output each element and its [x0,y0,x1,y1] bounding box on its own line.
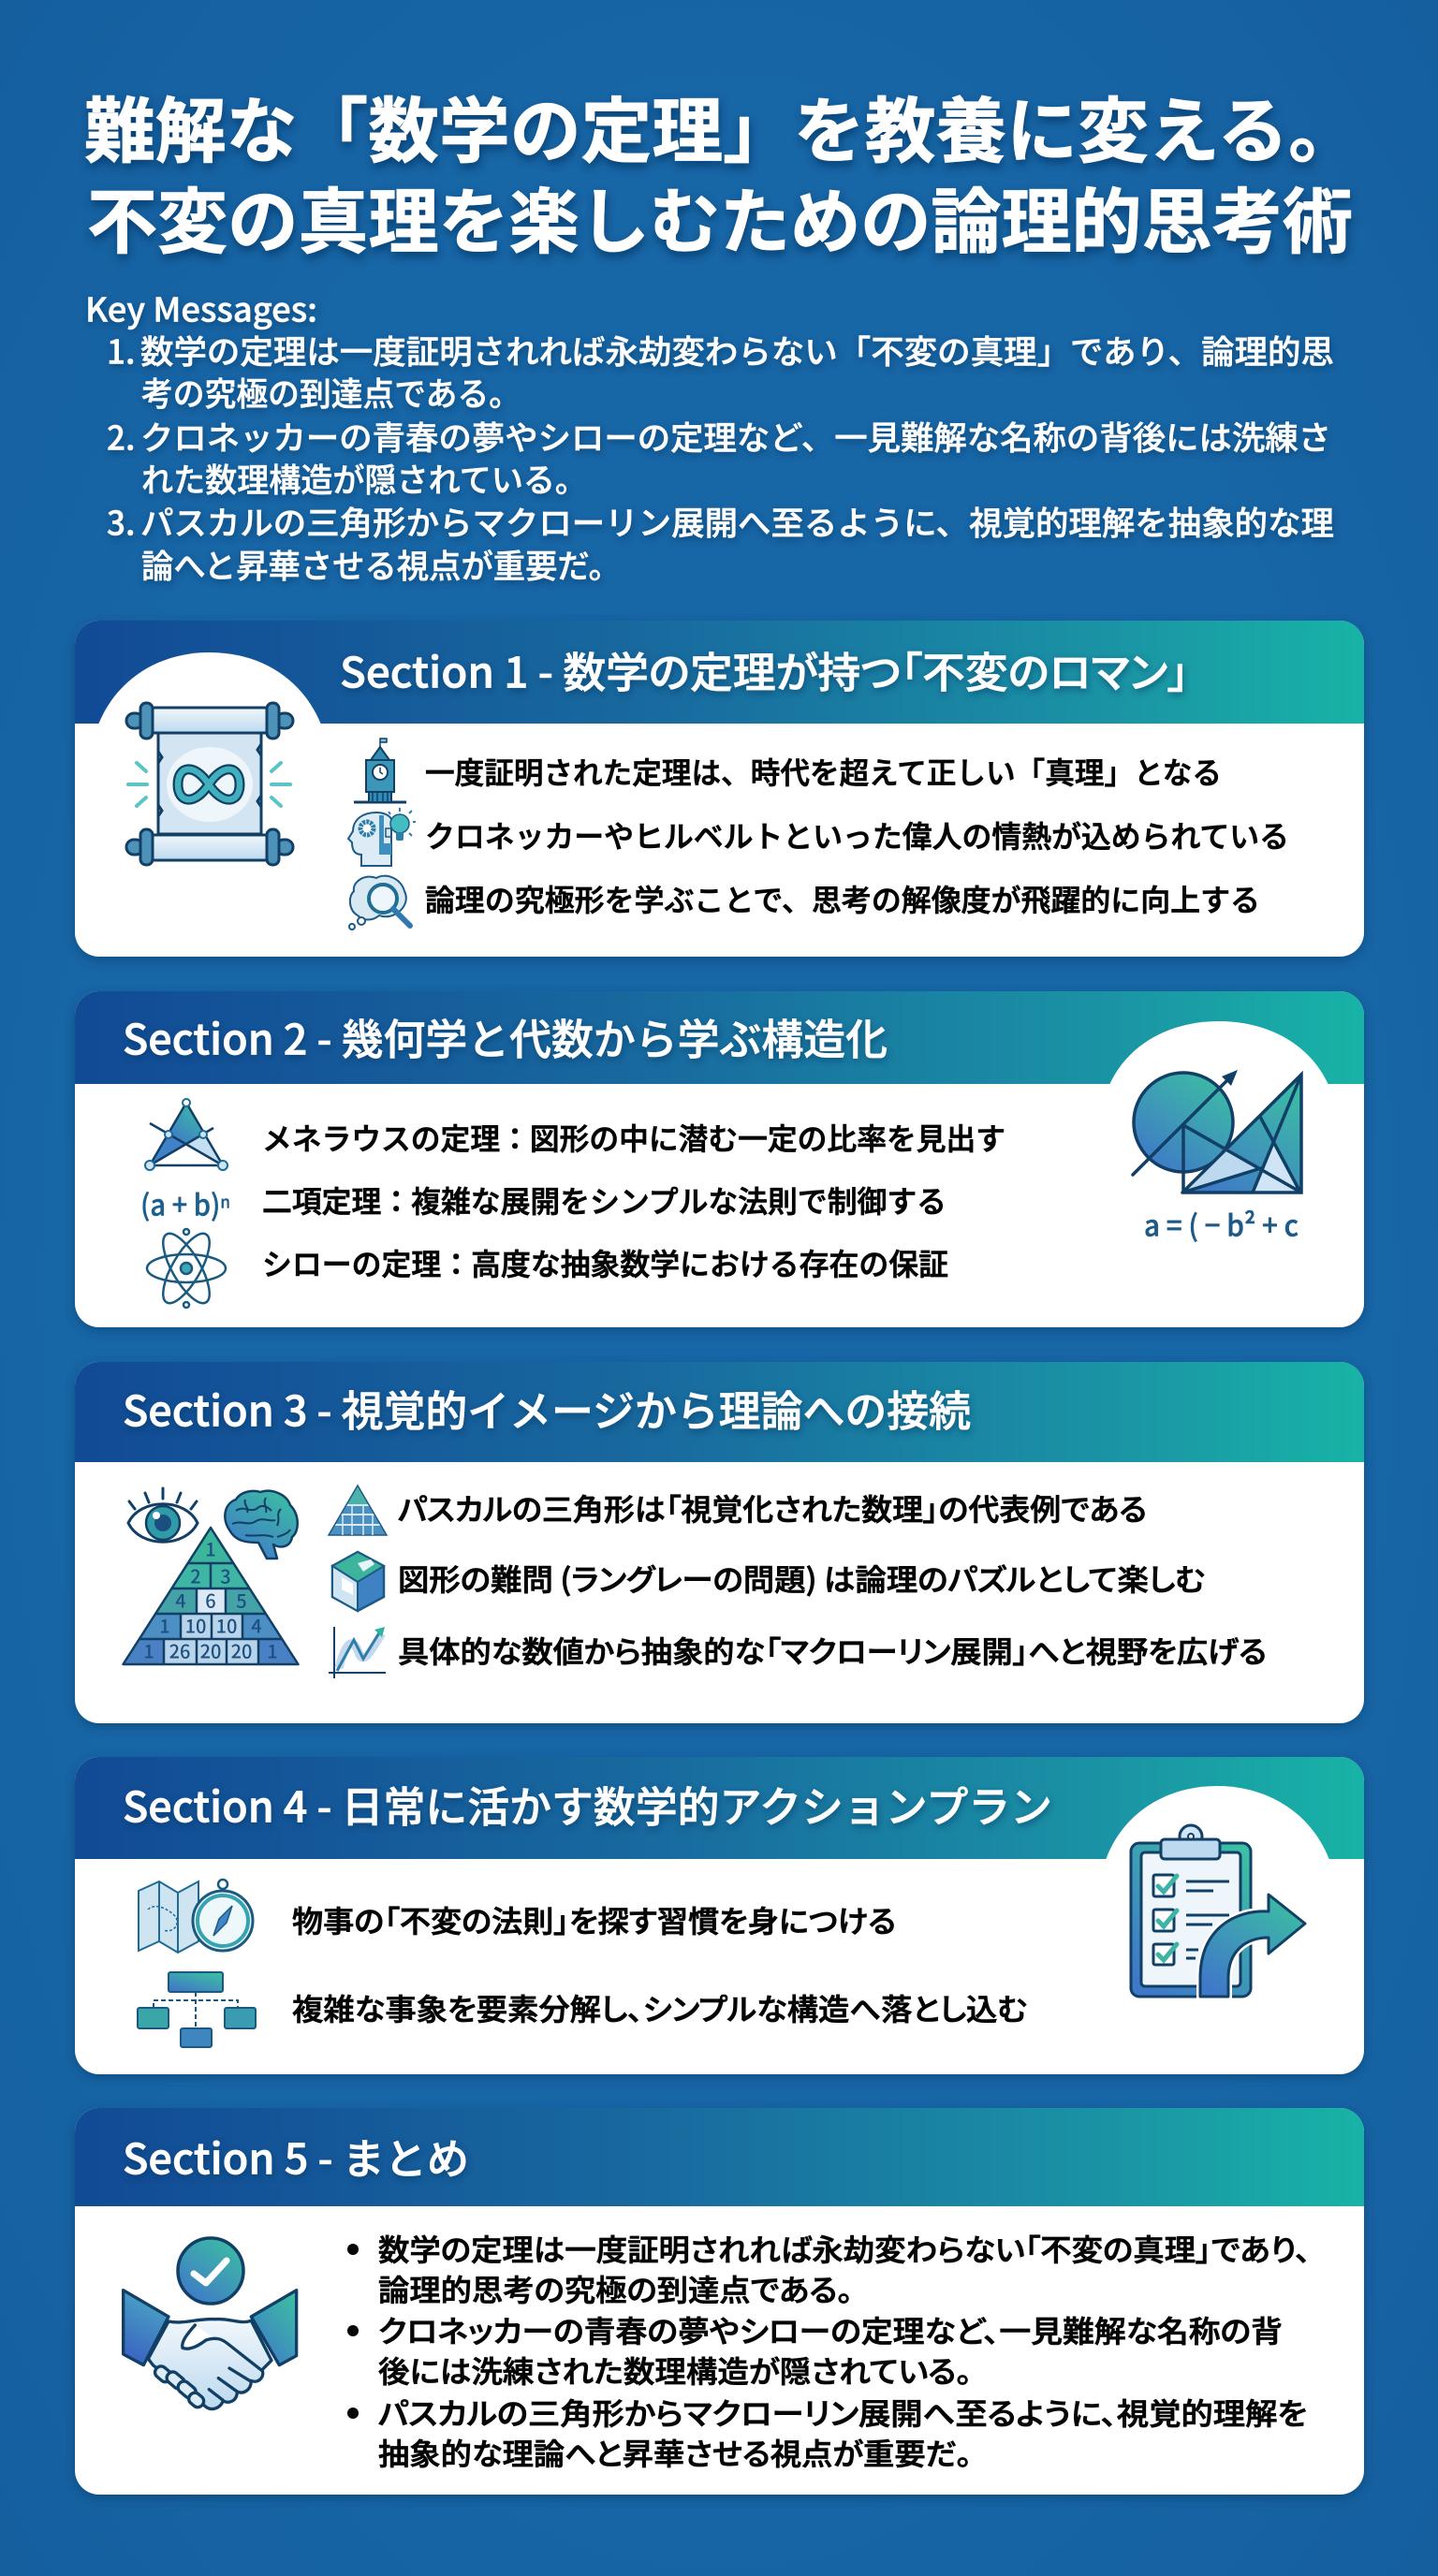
chart: pascal triangle [124,1528,298,1664]
section 1 heading: Section 1 - 数学の定理が持つ「不変のロマン」 [340,638,1189,700]
key messages [85,285,1334,588]
section 5 summary list: パスカルの三角形からマクローリン展開へ至るように、視覚的理解を [378,2391,1307,2434]
section 5 summary list [347,2227,1311,2474]
key messages: Key Messages: [85,285,317,331]
icon: geometry figure with formula [1133,1070,1301,1245]
title: 難解な「数学の定理」を教養に変える。 [84,74,1359,177]
section 5 heading: Section 5 - まとめ [123,2125,469,2187]
key messages: 1. [107,326,135,374]
chart: pascal triangle: 1 [267,1636,278,1664]
section 1 bullet text: 論理の究極形を学ぶことで、思考の解像度が飛躍的に向上する [425,877,1260,920]
panel: section 3 [75,1362,1364,1723]
chart: pascal triangle: 26 [169,1636,190,1664]
key messages: 論へと昇華させる視点が重要だ。 [141,541,621,588]
panel: section 2 [75,991,1364,1327]
panel: section 1 [75,621,1364,957]
section 5 summary list: クロネッカーの青春の夢やシローの定理など、一見難解な名称の背 [378,2308,1283,2351]
section 5 summary list: 後には洗練された数理構造が隠されている。 [378,2349,972,2392]
section 4 header band [75,1757,1364,1859]
chart: pascal triangle: 4 [251,1612,262,1638]
key messages: れた数理構造が隠されている。 [141,455,587,502]
chart: pascal triangle: 3 [220,1561,231,1589]
section 2 bullet text: シローの定理：高度な抽象数学における存在の保証 [262,1241,948,1284]
icon: cube puzzle [332,1552,384,1611]
key messages: パスカルの三角形からマクローリン展開へ至るように、視覚的理解を抽象的な理 [140,498,1334,545]
chart: pascal triangle: 1 [205,1535,216,1561]
icon: eye [128,1488,198,1542]
chart: pascal triangle: 1 [143,1636,154,1664]
section 2 bullet text: 二項定理：複雑な展開をシンプルな法則で制御する [262,1178,946,1222]
icon: atom [147,1227,226,1310]
chart: pascal triangle: 10 [216,1612,237,1638]
title: 不変の真理を楽しむための論理的思考術 [87,165,1353,268]
chart: pascal triangle: 10 [185,1612,206,1638]
section 3 bullet text: パスカルの三角形は「視覚化された数理」の代表例である [398,1486,1147,1530]
key messages: 2. [107,412,135,461]
chart: pascal triangle: 20 [200,1636,221,1664]
key messages: 数学の定理は一度証明されれば永劫変わらない「不変の真理」であり、論理的思 [140,326,1334,374]
section 3 bullet text [398,1486,1267,1672]
section 2 heading: Section 2 - 幾何学と代数から学ぶ構造化 [123,1005,888,1067]
icon: clipboard with arrow [1131,1825,1305,1997]
section 2 bullet text: メネラウスの定理：図形の中に潜む一定の比率を見出す [262,1116,1005,1159]
section 1 icon dome [98,652,321,724]
icon: handshake with check [124,2238,297,2409]
chart: pascal triangle: 6 [205,1586,216,1614]
section 3 header band [75,1362,1364,1462]
section 2 icon dome [1109,1021,1328,1085]
key messages: 3. [107,498,135,545]
icon: geometry figure with formula: a = ( − b² + c [1144,1202,1299,1245]
icon: thought cloud with magnifier [349,876,410,929]
section 1 bullet text: 一度証明された定理は、時代を超えて正しい「真理」となる [425,750,1222,793]
key messages: クロネッカーの青春の夢やシローの定理など、一見難解な名称の背後には洗練さ [140,412,1331,461]
icon: map and compass [139,1880,253,1953]
key messages: 考の究極の到達点である。 [141,369,521,416]
section 1 bullet text: クロネッカーやヒルベルトといった偉人の情熱が込められている [425,813,1289,856]
icon: binomial formula: (a + b)ⁿ [140,1181,230,1224]
section 3 bullet text: 図形の難問 (ラングレーの問題) は論理のパズルとして楽しむ [398,1557,1205,1600]
section 1 bullet text [425,750,1289,920]
chart: pascal triangle: 4 [175,1586,186,1614]
section 2 bullet text [262,1116,1005,1284]
section 5 summary list: 抽象的な理論へと昇華させる視点が重要だ。 [378,2431,972,2474]
section 4 bullet text: 複雑な事象を要素分解し、シンプルな構造へ落とし込む [292,1986,1027,2029]
section 3 heading: Section 3 - 視覚的イメージから理論への接続 [123,1378,971,1438]
section 5 summary list: 数学の定理は一度証明されれば永劫変わらない「不変の真理」であり、 [378,2227,1311,2270]
icon: flow chart [138,1972,256,2047]
icon: head with gears and light bulb [348,808,416,866]
section 4 icon dome [1106,1786,1329,1860]
panel: section 5 [75,2108,1364,2495]
title [84,74,1359,268]
icon: infinity scroll [126,703,293,865]
icon: clock tower [354,739,406,802]
section 4 heading: Section 4 - 日常に活かす数学的アクションプラン [123,1773,1052,1835]
chart: pascal triangle: 5 [236,1586,247,1614]
section 1 header band [75,621,1364,724]
section 4 bullet text [292,1898,1027,2029]
section 3 bullet text: 具体的な数値から抽象的な「マクローリン展開」へと視野を広げる [398,1629,1267,1672]
icon: rising chart [329,1627,386,1678]
icon: brain [225,1491,298,1559]
icon: menelaus triangle [145,1099,227,1170]
section 4 bullet text: 物事の「不変の法則」を探す習慣を身につける [292,1898,896,1941]
section 2 header band [75,991,1364,1084]
icon: small pascal triangle [329,1486,387,1535]
panel: section 4 [75,1757,1364,2074]
chart: pascal triangle: 2 [190,1561,201,1589]
section 5 header band [75,2108,1364,2206]
chart: pascal triangle: 1 [159,1612,170,1638]
section 5 summary list: 論理的思考の究極の到達点である。 [378,2267,853,2310]
chart: pascal triangle: 20 [231,1636,252,1664]
